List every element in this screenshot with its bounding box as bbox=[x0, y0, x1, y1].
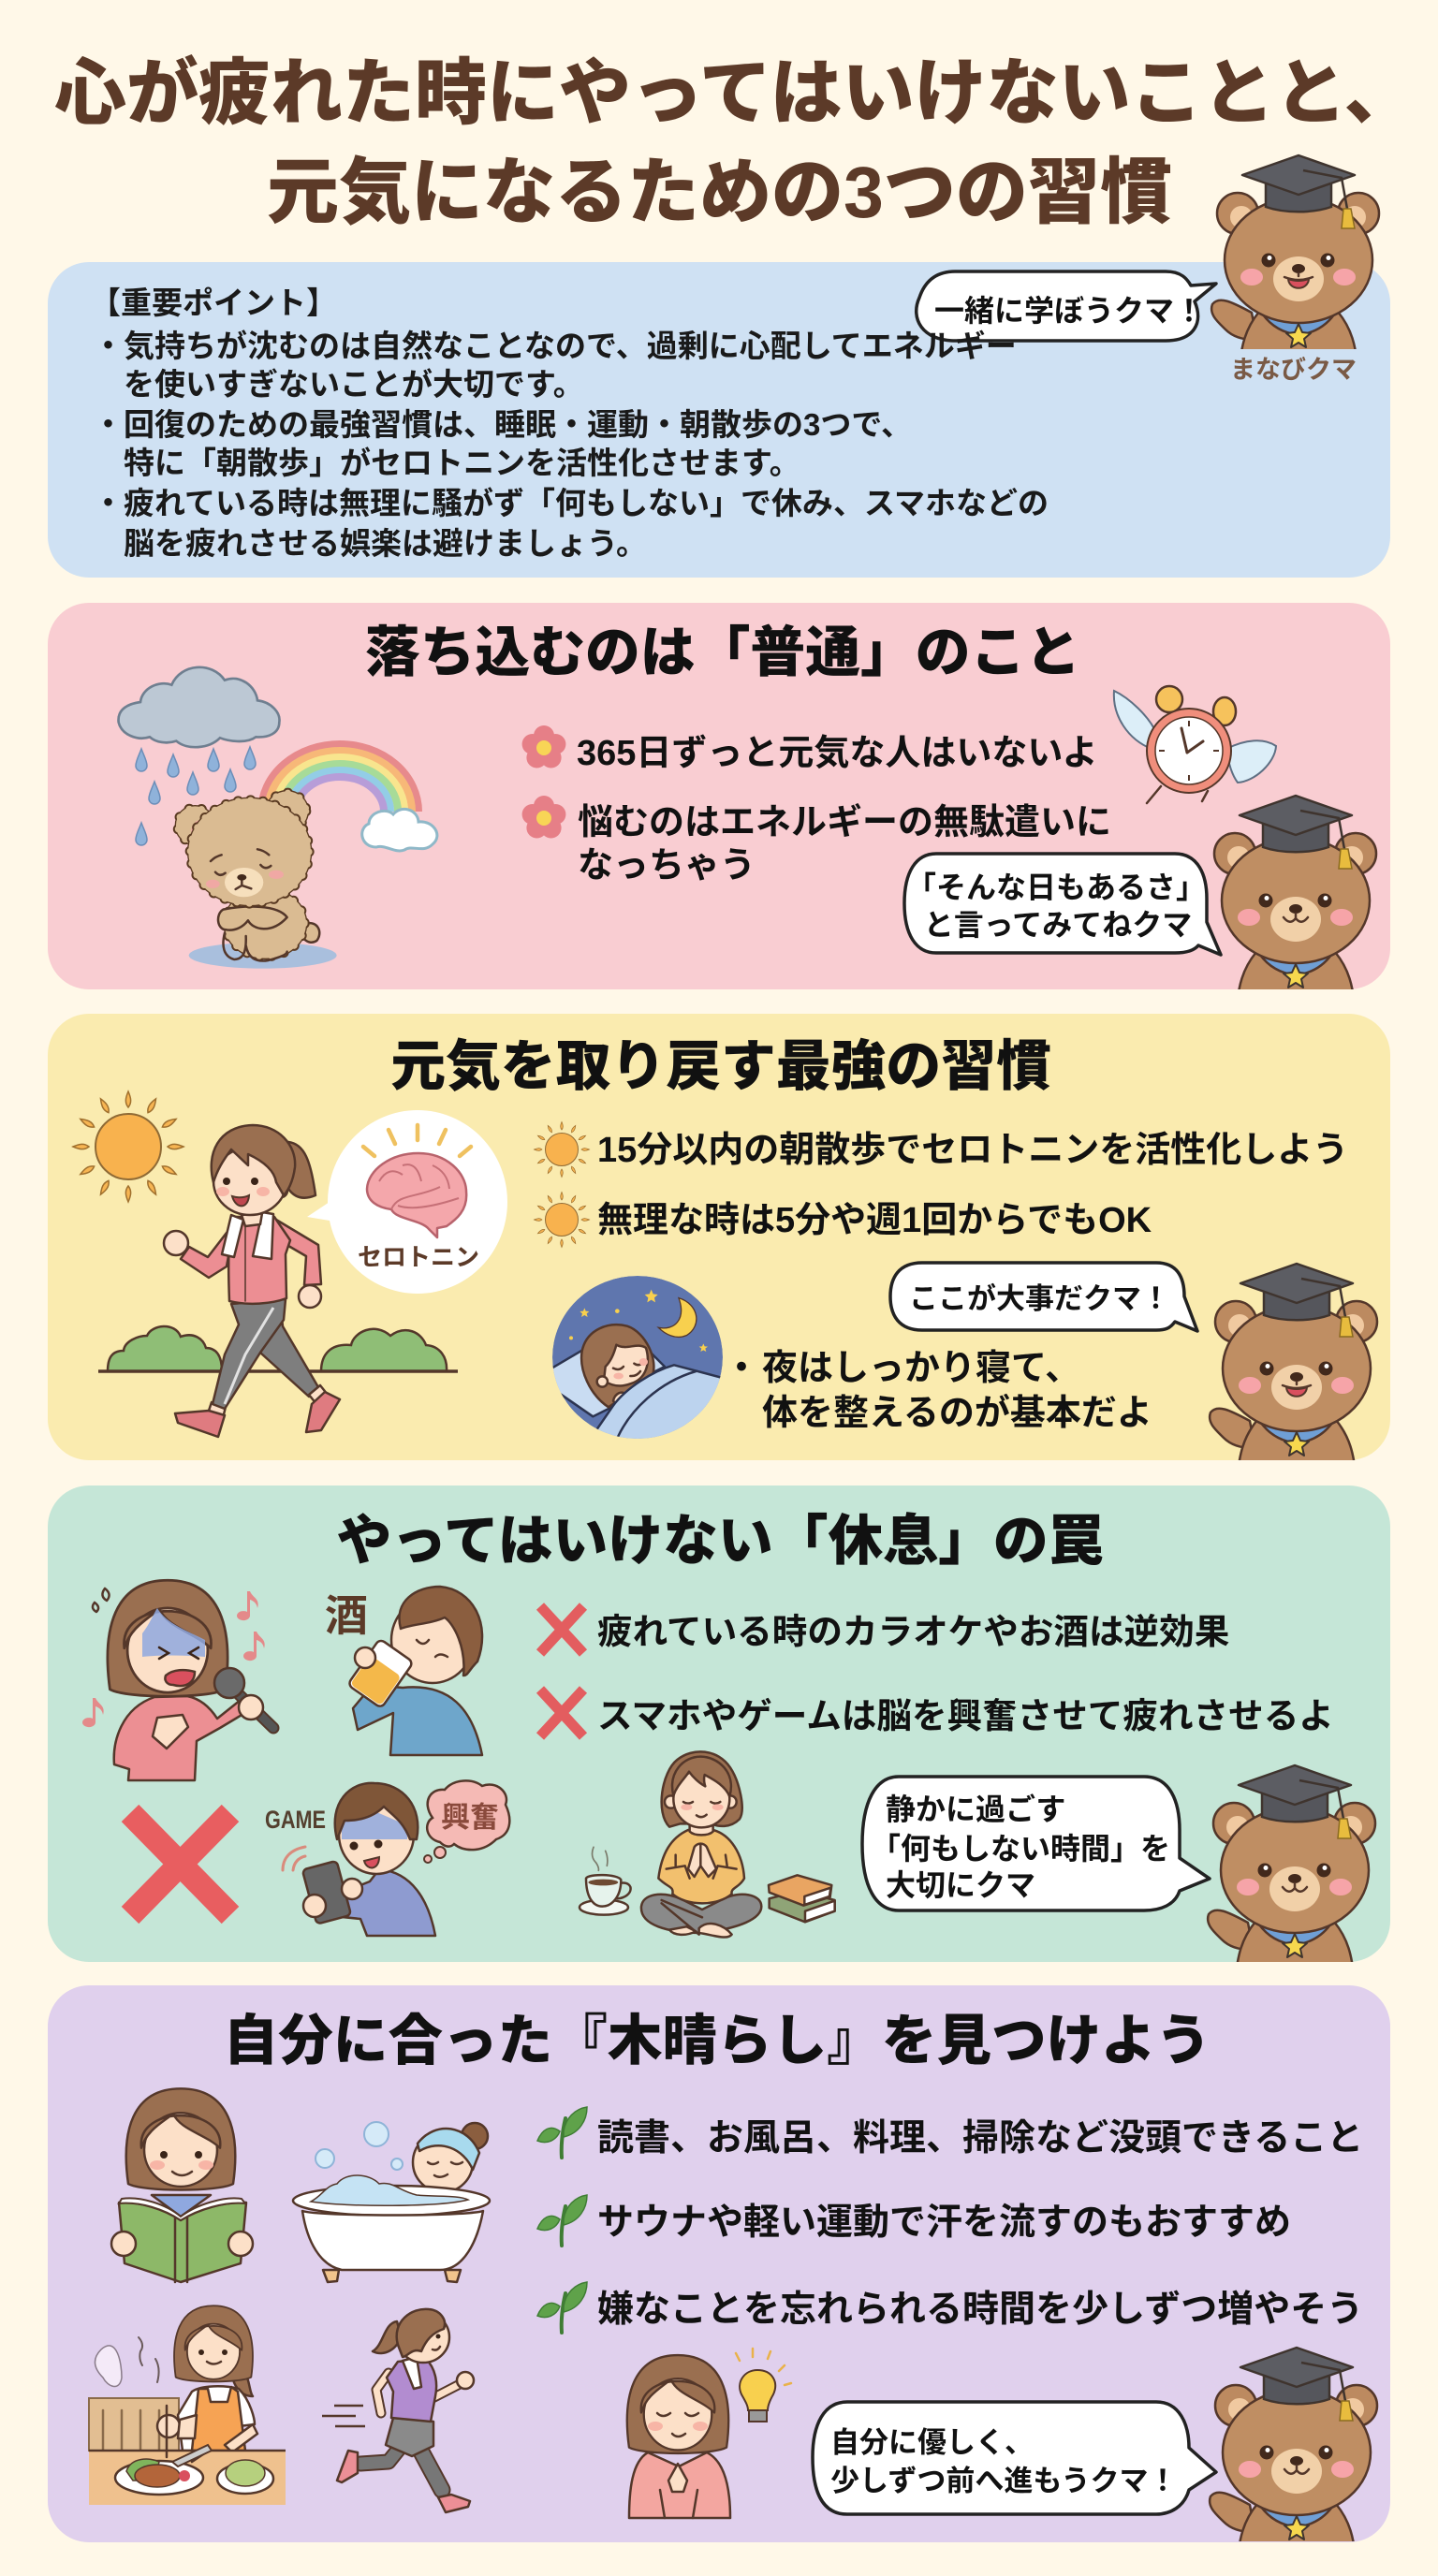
key points text: 脳を疲れさせる娯楽は避けましょう。 bbox=[124, 526, 647, 561]
key points text: ・ bbox=[93, 486, 124, 520]
list item: flower bullet bbox=[522, 796, 1111, 886]
speech bubble: quiet time: 大切にクマ bbox=[886, 1868, 1035, 1902]
key points text: を使いすぎないことが大切です。 bbox=[124, 367, 584, 402]
title: 元気になるための3つの習慣 bbox=[267, 153, 1172, 233]
icon: small white cloud bbox=[362, 809, 437, 851]
icon: rain cloud bbox=[119, 667, 279, 845]
bear mascot: manabi kuma bbox=[1210, 154, 1380, 349]
panel: find your own refresh bbox=[48, 1985, 1390, 2569]
speech bubble: such days happen bbox=[904, 854, 1221, 955]
list item: sun bullet bbox=[534, 1193, 1152, 1247]
thought bubble: excitement: 興奮 bbox=[441, 1801, 499, 1834]
list item: sleep text bbox=[724, 1349, 1152, 1433]
bear mascot bbox=[1210, 1264, 1377, 1486]
label: serotonin: セロトニン bbox=[358, 1243, 479, 1271]
list item: flower bullet: 悩むのはエネルギーの無駄遣いに bbox=[578, 803, 1111, 842]
illustration: running woman bbox=[322, 2309, 474, 2512]
illustration: woman reading a book bbox=[111, 2088, 253, 2282]
panel: resting traps bbox=[48, 1486, 1390, 1987]
title bbox=[54, 53, 1416, 233]
icon: winged alarm clock bbox=[1114, 686, 1276, 803]
illustration: woman praying with idea bbox=[627, 2355, 730, 2518]
list item: sleep text: 体を整えるのが基本だよ bbox=[762, 1394, 1152, 1433]
illustration: jogging woman bbox=[164, 1125, 340, 1437]
list item: sleep text: 夜はしっかり寝て、 bbox=[762, 1349, 1080, 1388]
list item: sleep text: ・ bbox=[724, 1349, 759, 1388]
list item: flower bullet: 365日ずっと元気な人はいないよ bbox=[577, 734, 1098, 773]
icon: coffee cup bbox=[580, 1847, 631, 1915]
title: 心が疲れた時にやってはいけないことと、 bbox=[54, 53, 1416, 134]
list item: cross bullet: スマホやゲームは脳を興奮させて疲れさせるよ bbox=[597, 1696, 1334, 1735]
speech bubble: quiet time: 「何もしない時間」を bbox=[871, 1832, 1170, 1866]
speech bubble: let's learn bbox=[917, 271, 1216, 341]
illustration: sleeping at night bbox=[552, 1276, 723, 1439]
list item: flower bullet: なっちゃう bbox=[578, 846, 756, 886]
key points text: 特に「朝散歩」がセロトニンを活性化させます。 bbox=[124, 446, 800, 480]
list item: sprout bullet: 読書、お風呂、料理、掃除など没頭できること bbox=[597, 2118, 1363, 2159]
key points text: 気持ちが沈むのは自然なことなので、過剰に心配してエネルギー bbox=[124, 329, 1017, 363]
heading: やってはいけない「休息」の罠 bbox=[336, 1511, 1104, 1572]
icon: rainbow bbox=[261, 744, 418, 812]
list item: sun bullet: 15分以内の朝散歩でセロトニンを活性化しよう bbox=[597, 1131, 1348, 1170]
bear mascot bbox=[1208, 1765, 1375, 1987]
heading: 自分に合った『木晴らし』を見つけよう bbox=[224, 2011, 1211, 2071]
list item: sun bullet: 無理な時は5分や週1回からでもOK bbox=[597, 1201, 1152, 1240]
panel: key points bbox=[48, 155, 1390, 578]
illustration: meditating woman bbox=[641, 1751, 761, 1938]
key points text: 疲れている時は無理に騒がず「何もしない」で休み、スマホなどの bbox=[124, 486, 1049, 520]
illustration: woman cooking bbox=[89, 2305, 286, 2505]
panel: feeling down is normal bbox=[48, 603, 1390, 1017]
illustration: woman in bubble bath bbox=[293, 2122, 490, 2282]
key points text: ・ bbox=[93, 407, 124, 442]
heading: 元気を取り戻す最強の習慣 bbox=[390, 1036, 1051, 1097]
speech bubble: this is important bbox=[890, 1263, 1197, 1331]
illustration: man drinking beer: 酒 bbox=[325, 1591, 368, 1640]
speech bubble: let's learn: 一緒に学ぼうクマ！ bbox=[934, 294, 1204, 328]
list item: cross bullet: 疲れている時のカラオケやお酒は逆効果 bbox=[597, 1612, 1229, 1651]
speech bubble: this is important: ここが大事だクマ！ bbox=[909, 1282, 1170, 1315]
illustration: boy with smartphone bbox=[265, 1783, 435, 1936]
bear mascot bbox=[1208, 2346, 1378, 2541]
icon: big red cross bbox=[130, 1813, 230, 1915]
speech bubble: such days happen: と言ってみてねクマ bbox=[924, 908, 1192, 942]
key points text: 回復のための最強習慣は、睡眠・運動・朝散歩の3つで、 bbox=[124, 407, 912, 442]
icon: sad bear bbox=[178, 793, 337, 969]
illustration: man drinking beer bbox=[325, 1587, 482, 1755]
speech bubble: quiet time bbox=[862, 1777, 1210, 1910]
icon: stack of books bbox=[769, 1875, 835, 1922]
illustration: boy with smartphone: GAME bbox=[265, 1806, 326, 1834]
icon: brain bbox=[363, 1125, 471, 1237]
icon: light bulb bbox=[736, 2349, 791, 2422]
speech bubble: such days happen: 「そんな日もあるさ」 bbox=[906, 871, 1206, 904]
thought bubble: excitement bbox=[424, 1780, 509, 1863]
speech bubble: be kind to yourself: 少しずつ前へ進もうクマ！ bbox=[830, 2465, 1177, 2497]
key points text bbox=[90, 285, 1049, 561]
speech bubble: be kind to yourself bbox=[813, 2402, 1216, 2514]
speech bubble: quiet time: 静かに過ごす bbox=[886, 1793, 1065, 1826]
list item: sprout bullet: 嫌なことを忘れられる時間を少しずつ増やそう bbox=[597, 2290, 1363, 2330]
list item: sun bullet bbox=[534, 1121, 1348, 1178]
key points text: 【重要ポイント】 bbox=[90, 285, 337, 320]
speech bubble: be kind to yourself: 自分に優しく、 bbox=[830, 2426, 1034, 2459]
bear mascot bbox=[1213, 794, 1378, 989]
mascot name: まなびクマ bbox=[1230, 356, 1357, 384]
icon: big sun bbox=[73, 1091, 183, 1202]
speech circle: serotonin brain bbox=[307, 1110, 507, 1294]
illustration: tired woman singing karaoke bbox=[82, 1580, 273, 1780]
icon: bushes and ground bbox=[98, 1326, 458, 1371]
list item: sprout bullet: サウナや軽い運動で汗を流すのもおすすめ bbox=[597, 2203, 1291, 2243]
panel: strongest habit bbox=[48, 1014, 1390, 1486]
heading: 落ち込むのは「普通」のこと bbox=[365, 622, 1080, 683]
key points text: ・ bbox=[93, 329, 124, 363]
